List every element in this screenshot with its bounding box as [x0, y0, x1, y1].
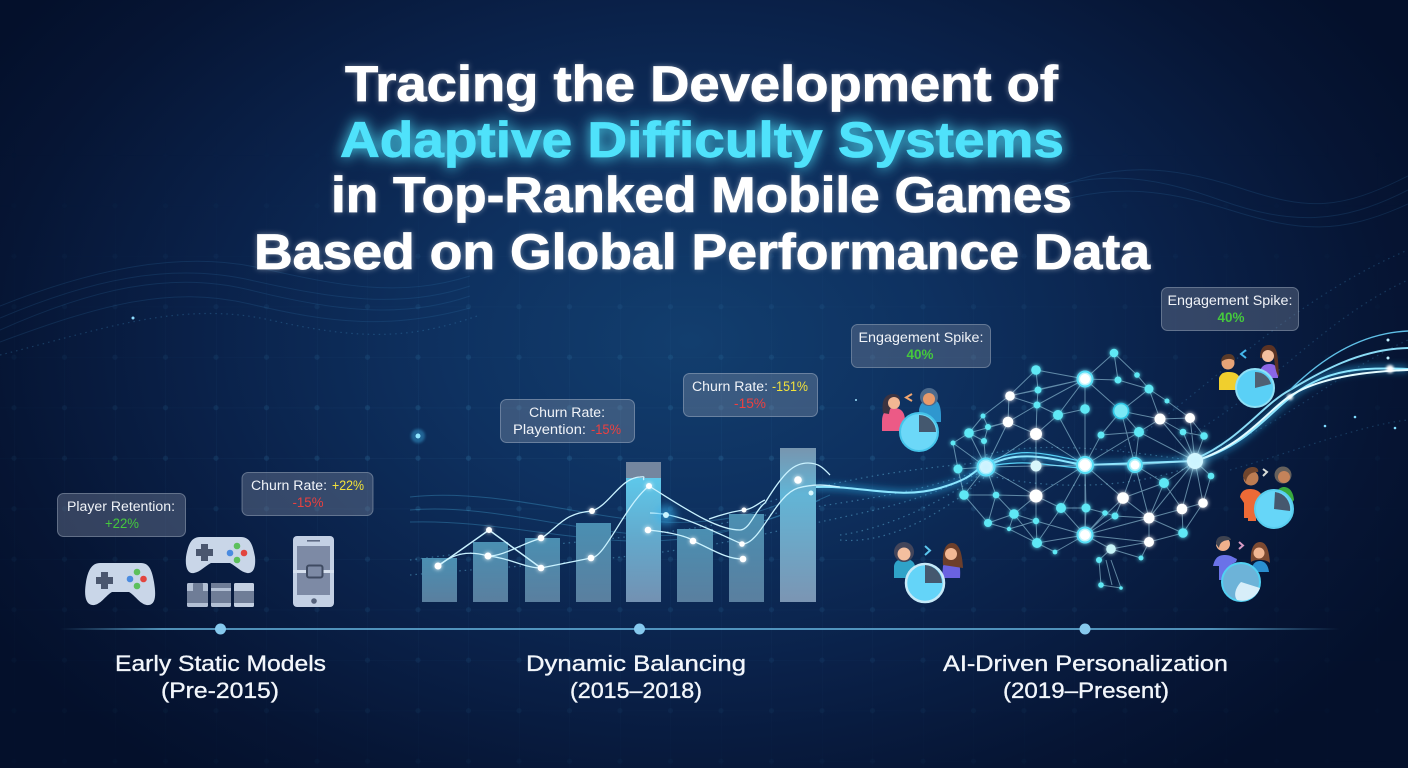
callout: engagement spike 1: Engagement Spike: — [858, 329, 984, 345]
neural network brain — [950, 349, 1214, 590]
trend lines — [438, 463, 840, 568]
bar chart — [422, 448, 840, 602]
callout: engagement spike 1: 40% — [906, 346, 934, 362]
callout: player retention: +22% — [105, 516, 139, 531]
icon: game controller 2 with tiles — [186, 537, 255, 607]
era label: early static models: (Pre-2015) — [161, 678, 279, 703]
callout: player retention: Player Retention: — [67, 499, 175, 514]
era label: dynamic balancing: (2015–2018) — [570, 678, 702, 703]
era label: dynamic balancing — [526, 651, 746, 703]
callout: churn rate 1: -15% — [292, 495, 324, 510]
callout: churn rate 3 — [684, 374, 818, 416]
title line 3: in Top-Ranked Mobile Games — [331, 167, 1072, 223]
callout: churn rate 1: Churn Rate: — [251, 478, 327, 493]
era label: early static models: Early Static Models — [115, 651, 326, 676]
chart glow — [656, 490, 814, 525]
network connections — [953, 353, 1211, 588]
callout: churn rate 3: -151% — [772, 379, 808, 394]
era label: AI personalization — [943, 651, 1228, 703]
callout: player retention — [58, 494, 186, 536]
timeline marker: early — [215, 624, 226, 634]
title — [254, 56, 1151, 280]
timeline — [60, 624, 1340, 634]
people group 5 with pie chart — [1213, 536, 1270, 601]
hub nodes — [978, 372, 1203, 542]
callout: churn rate 2: Churn Rate: — [529, 405, 605, 420]
callout: churn rate 2: Playention: — [513, 422, 586, 437]
era label: early static models — [115, 651, 326, 703]
era label: AI personalization: AI-Driven Personalization — [943, 651, 1228, 676]
white nodes — [1003, 391, 1208, 554]
era label: dynamic balancing: Dynamic Balancing — [526, 651, 746, 676]
people group 4 with pie chart — [1240, 466, 1294, 528]
title line 2: Adaptive Difficulty Systems — [340, 112, 1064, 168]
icon: game controller 1 — [85, 563, 155, 605]
people group 3 with pie chart — [1219, 345, 1279, 407]
people group 2 with pie chart — [894, 542, 963, 602]
callout: engagement spike 2: Engagement Spike: — [1168, 292, 1292, 308]
flowing data wave — [410, 331, 1408, 575]
tiles — [187, 583, 254, 607]
callout: churn rate 3: -15% — [734, 396, 766, 411]
callout: churn rate 3: Churn Rate: — [692, 379, 768, 394]
callout: churn rate 2 — [500, 400, 634, 442]
timeline marker: AI — [1080, 624, 1090, 634]
title line 4: Based on Global Performance Data — [254, 224, 1151, 280]
callout: churn rate 1: +22% — [332, 478, 364, 493]
callout: engagement spike 2 — [1162, 288, 1298, 330]
callout: churn rate 2: -15% — [591, 422, 621, 437]
callout: churn rate 1 — [242, 472, 373, 516]
callout: engagement spike 1 — [852, 324, 990, 368]
title line 1: Tracing the Development of — [345, 56, 1058, 112]
bars — [422, 448, 816, 602]
timeline marker: dynamic — [634, 624, 645, 634]
era label: AI personalization: (2019–Present) — [1003, 678, 1169, 703]
icon: smartphone — [293, 536, 334, 607]
callout: engagement spike 2: 40% — [1218, 309, 1245, 325]
data points — [434, 476, 802, 571]
people group 1 with pie chart — [882, 388, 941, 451]
cyan nodes — [950, 349, 1214, 590]
